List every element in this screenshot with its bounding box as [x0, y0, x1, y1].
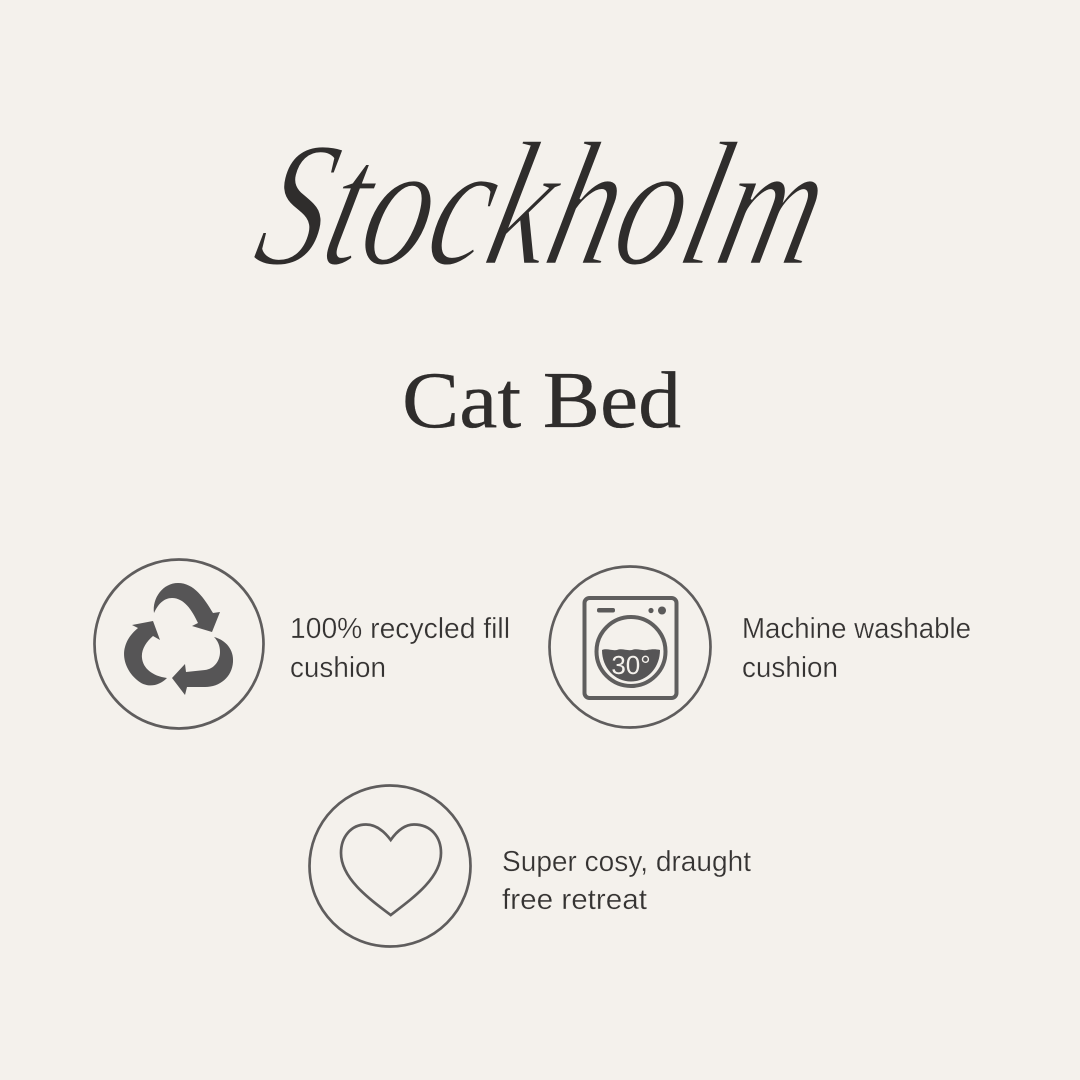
- label: machine washable: Machine washable: [742, 613, 971, 645]
- label: cosy retreat: Super cosy, draught: [502, 846, 751, 878]
- feature: machine washable: [550, 566, 971, 728]
- icon: washing machine 30 degrees: 30°: [611, 650, 651, 680]
- feature: cosy retreat: [310, 786, 751, 946]
- label: recycled fill: cushion: [290, 652, 386, 684]
- icon: recycling arrows: [94, 560, 264, 728]
- icon: washing machine 30 degrees: [550, 566, 710, 728]
- subtitle: Cat Bed: Cat Bed: [402, 357, 681, 445]
- label: cosy retreat: free retreat: [502, 884, 647, 916]
- label: machine washable: cushion: [742, 652, 838, 684]
- label: recycled fill: 100% recycled fill: [290, 613, 510, 645]
- feature: recycled fill: [94, 560, 510, 728]
- icon: heart: [310, 786, 470, 946]
- title: Stockholm: Stockholm: [240, 106, 847, 303]
